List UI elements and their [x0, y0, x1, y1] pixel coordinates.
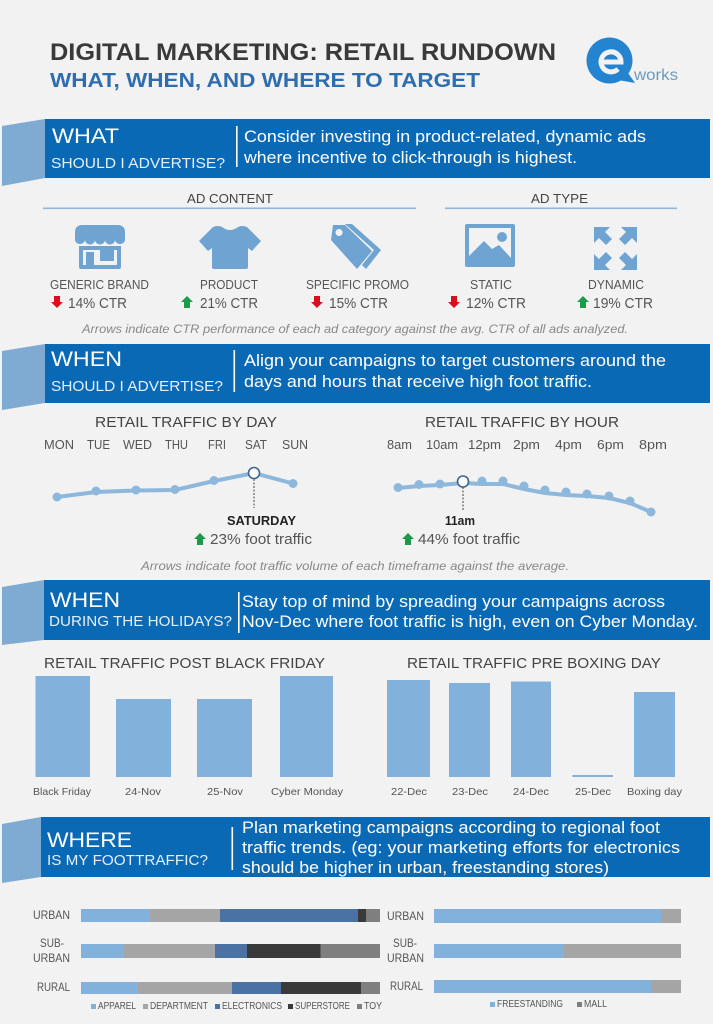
panel: where banner [2, 817, 710, 883]
chart: retail traffic post black friday: 25-Nov [207, 786, 244, 798]
panel: when banner: WHEN [51, 348, 122, 371]
chart: retail traffic by day: FRI [208, 437, 226, 452]
stat: product: 21% CTR [200, 295, 258, 312]
panel: what banner: SHOULD I ADVERTISE? [51, 155, 225, 172]
heading: ad type: AD TYPE [531, 191, 588, 206]
icon: t-shirt [199, 226, 261, 269]
chart: retail traffic post black friday: Cyber Monday [271, 786, 344, 798]
stat: specific promo: SPECIFIC PROMO [306, 277, 409, 292]
icon: price tags [331, 224, 381, 269]
stat: generic brand: GENERIC BRAND [50, 277, 149, 292]
legend: store categories [91, 1001, 382, 1012]
chart: foot traffic by store type and region: SUB- [393, 938, 417, 950]
chart: retail traffic by day: SAT [245, 437, 267, 452]
caption: foot traffic note: Arrows indicate foot traffic volume of each timeframe against the average. [140, 559, 569, 573]
panel: holidays banner: DURING THE HOLIDAYS? [49, 613, 232, 630]
panel: where banner: traffic trends. (eg: your marketing efforts for electronics [242, 838, 680, 857]
subtitle: WHAT, WHEN, AND WHERE TO TARGET [50, 70, 480, 92]
panel: holidays banner [2, 580, 710, 645]
callout: saturday: SATURDAY [227, 513, 296, 528]
callout: saturday: 23% foot traffic [210, 531, 313, 548]
caption: ctr note: Arrows indicate CTR performance of each ad category against the avg. CTR of all ads analyzed. [81, 322, 628, 336]
chart: retail traffic pre boxing day: 22-Dec [391, 786, 427, 798]
legend: store types [490, 999, 607, 1010]
chart: foot traffic by store type and region: RURAL [390, 981, 424, 993]
chart: foot traffic by store type and region [387, 909, 681, 1010]
chart: foot traffic by category and region: RURAL [37, 982, 71, 994]
chart: retail traffic by day: THU [165, 437, 188, 452]
chart: retail traffic pre boxing day [387, 655, 683, 798]
panel: holidays banner: WHEN [50, 589, 120, 612]
panel: what banner: WHAT [52, 125, 119, 148]
panel: what banner: where incentive to click-through is highest. [243, 148, 577, 167]
chart: retail traffic by day: SUN [282, 437, 308, 452]
chart: retail traffic by hour: 8am [387, 437, 412, 452]
chart: retail traffic by day: RETAIL TRAFFIC BY DAY [95, 414, 277, 431]
callout: 11am: 11am [445, 513, 475, 528]
chart: retail traffic post black friday: Black Friday [33, 786, 92, 798]
icon: dynamic expand arrows [594, 227, 637, 270]
panel: what banner: Consider investing in product-related, dynamic ads [244, 127, 646, 146]
logo: eqworks: works [633, 67, 678, 84]
chart: retail traffic by hour: 8pm [639, 437, 667, 452]
chart: retail traffic by hour: 10am [426, 437, 458, 452]
panel: where banner: Plan marketing campaigns according to regional foot [242, 818, 660, 837]
panel: when banner: days and hours that receive high foot traffic. [244, 372, 592, 391]
stat: dynamic [577, 277, 653, 312]
panel: when banner: Align your campaigns to target customers around the [244, 351, 666, 370]
chart: retail traffic pre boxing day: 24-Dec [513, 786, 549, 798]
panel: what banner [2, 119, 710, 186]
chart: foot traffic by category and region: URBAN [33, 910, 70, 922]
stat: static [448, 277, 526, 312]
stat: generic brand: 14% CTR [68, 295, 127, 312]
legend: store categories: ELECTRONICS [222, 1001, 282, 1012]
stat: specific promo [306, 277, 409, 312]
chart: foot traffic by category and region [33, 909, 382, 1012]
chart: foot traffic by store type and region: URBAN [387, 911, 424, 923]
chart: retail traffic by hour: 2pm [513, 437, 540, 452]
heading: ad content: AD CONTENT [187, 191, 273, 206]
chart: retail traffic post black friday [33, 655, 344, 798]
icon: store [75, 225, 125, 269]
chart: retail traffic by hour [387, 414, 667, 516]
legend: store categories: DEPARTMENT [150, 1001, 208, 1012]
callout: 11am: 44% foot traffic [418, 531, 521, 548]
callout: saturday [194, 513, 313, 548]
chart: foot traffic by store type and region: URBAN [387, 953, 424, 965]
panel: where banner: IS MY FOOTTRAFFIC? [47, 852, 208, 869]
chart: retail traffic pre boxing day: 25-Dec [575, 786, 611, 798]
stat: product [181, 277, 258, 312]
panel: holidays banner: Stay top of mind by spreading your campaigns across [242, 592, 665, 611]
chart: retail traffic by hour: RETAIL TRAFFIC BY HOUR [425, 414, 619, 431]
stat: product: PRODUCT [200, 277, 258, 292]
legend: store categories: SUPERSTORE [295, 1001, 350, 1012]
legend: store categories: TOY [364, 1001, 382, 1012]
stat: dynamic: DYNAMIC [588, 277, 644, 292]
stat: generic brand [50, 277, 149, 312]
chart: retail traffic by day: TUE [87, 437, 110, 452]
panel: when banner: SHOULD I ADVERTISE? [51, 378, 223, 395]
panel: where banner: should be higher in urban, freestanding stores) [242, 858, 609, 877]
chart: retail traffic by hour: 6pm [597, 437, 624, 452]
stat: dynamic: 19% CTR [593, 295, 653, 312]
chart: retail traffic by day: WED [123, 437, 152, 452]
chart: retail traffic post black friday: RETAIL TRAFFIC POST BLACK FRIDAY [44, 655, 325, 672]
stat: static: 12% CTR [466, 295, 526, 312]
chart: foot traffic by category and region: SUB- [40, 938, 64, 950]
chart: retail traffic pre boxing day: RETAIL TRAFFIC PRE BOXING DAY [407, 655, 661, 672]
chart: retail traffic pre boxing day: 23-Dec [452, 786, 488, 798]
panel: where banner: WHERE [47, 829, 132, 852]
legend: store types: MALL [584, 999, 607, 1010]
chart: retail traffic pre boxing day: Boxing day [627, 786, 683, 798]
chart: foot traffic by category and region: URBAN [33, 953, 70, 965]
callout: 11am [402, 513, 521, 548]
chart: retail traffic by day [44, 414, 308, 508]
legend: store categories: APPAREL [98, 1001, 136, 1012]
icon: static image [465, 224, 515, 267]
legend: store types: FREESTANDING [497, 999, 563, 1010]
chart: retail traffic by hour: 12pm [468, 437, 501, 452]
stat: static: STATIC [470, 277, 512, 292]
chart: retail traffic by hour: 4pm [555, 437, 582, 452]
chart: retail traffic post black friday: 24-Nov [125, 786, 162, 798]
logo: eqworks [586, 38, 678, 84]
panel: holidays banner: Nov-Dec where foot traffic is high, even on Cyber Monday. [242, 612, 698, 631]
panel: when banner [2, 344, 710, 410]
stat: specific promo: 15% CTR [329, 295, 388, 312]
chart: retail traffic by day: MON [44, 437, 74, 452]
title: DIGITAL MARKETING: RETAIL RUNDOWN [50, 39, 556, 66]
